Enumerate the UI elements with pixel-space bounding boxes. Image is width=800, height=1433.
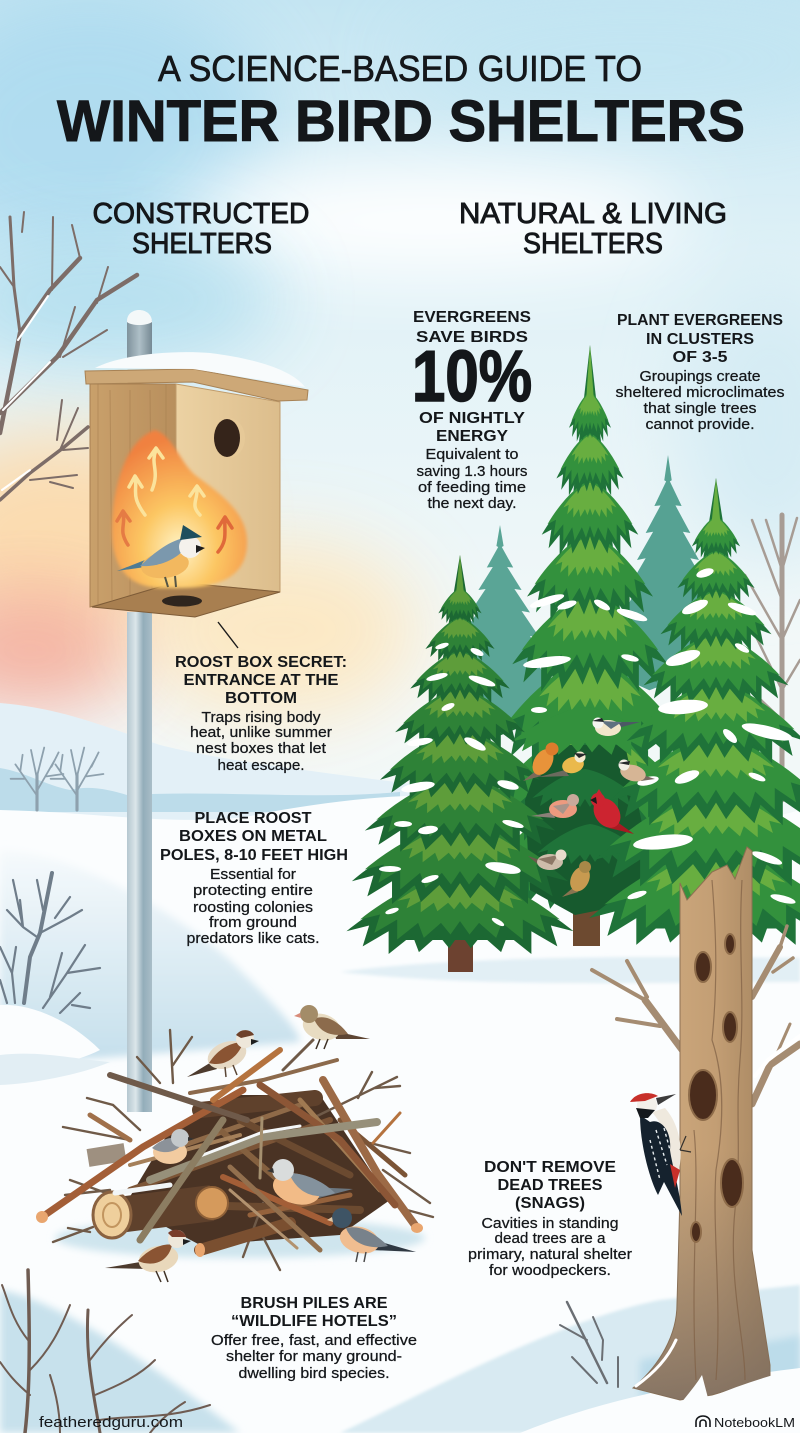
stacked branch: reddish [42,1090,243,1217]
callout: roost box secret [175,654,347,774]
bare tree: upper left [0,212,137,500]
hole interior [214,419,240,457]
front hole [213,418,245,458]
callout: plant in clusters: cannot provide. [646,417,754,433]
bird: junco [327,1208,416,1262]
bare tree: bottom left [0,1270,210,1433]
snag branches [592,926,800,1104]
callout: evergreens save energy [412,309,532,512]
bird: brown top [294,1005,370,1049]
callout: snags [468,1159,632,1279]
callout: plant in clusters: that single trees [644,401,756,417]
evergreen trunk: centre [573,900,600,946]
pile interior [125,1095,390,1245]
callout: place on metal poles: POLES, 8-10 FEET HIGH [160,847,348,864]
snow landscape [0,703,800,1433]
callout: brush piles: “WILDLIFE HOTELS” [231,1313,397,1330]
callout: plant in clusters [616,312,784,433]
evergreen trunk: left [448,930,473,972]
callout: place on metal poles: predators like cats. [186,931,320,947]
dense sticks [130,1120,330,1190]
bare tree: right [740,515,800,800]
callout: evergreens save energy: EVERGREENS [413,309,531,326]
callout: evergreens save energy: saving 1.3 hours [416,464,528,480]
gap shade behind birds [525,745,650,915]
callout: plant in clusters: OF 3-5 [672,349,728,366]
heading: natural and living shelters: NATURAL & LIVING [459,198,727,230]
bird: sparrow ground [105,1230,191,1282]
snag trunk [633,847,770,1400]
cut logs [118,1203,212,1215]
callout: evergreens save energy: SAVE BIRDS [416,329,528,346]
evergreen: centre [480,345,700,912]
pile shadow [55,1218,425,1258]
callout: snags: dead trees are a [494,1231,606,1247]
log behind [200,1098,315,1110]
bird: titmouse in pile [267,1159,353,1210]
heading: constructed shelters: SHELTERS [132,228,272,260]
callout: roost box secret: heat, unlike summer [190,725,332,741]
woodpecker [630,1093,691,1216]
callout: roost box secret: BOTTOM [225,690,297,707]
callout: evergreens save energy: OF NIGHTLY [419,410,525,427]
snag base shading [633,1150,770,1400]
stub logs left [88,1152,125,1158]
callout: roost box secret: ENTRANCE AT THE [184,672,339,689]
bird: chickadee [592,718,640,736]
bird: yellow [539,752,587,777]
snow at snag base [660,1368,800,1433]
title: WINTER BIRD SHELTERS [57,89,745,154]
wood grain [98,384,166,604]
callout: place on metal poles: roosting colonies [193,900,313,916]
callout: evergreens save energy: Equivalent to [426,447,518,463]
title [57,48,745,154]
foreground branches [223,1177,330,1223]
callout: snags: primary, natural shelter [468,1247,632,1263]
callout: place on metal poles: PLACE ROOST [194,810,312,827]
callout: plant in clusters: Groupings create [640,369,760,385]
bare saplings: distant [11,748,103,810]
notebooklm mark: NotebookLM [714,1415,795,1430]
callout: place on metal poles: protecting entire [193,883,313,899]
callout: evergreens save energy: of feeding time [418,480,526,496]
roof snow [95,352,305,387]
callout: place on metal poles: BOXES ON METAL [179,828,327,845]
heading: constructed shelters: CONSTRUCTED [92,198,310,230]
background evergreen: teal right [606,455,730,690]
title: A SCIENCE-BASED GUIDE TO [158,48,642,89]
snag grain [694,880,745,1380]
bird: olive [562,861,594,897]
birds in evergreen [523,718,655,897]
callout: plant in clusters: IN CLUSTERS [646,331,754,348]
callout: brush piles: BRUSH PILES ARE [240,1295,388,1312]
callout: place on metal poles: Essential for [210,867,296,883]
bird: pink finch [531,794,579,818]
callout: evergreens save energy: ENERGY [436,428,508,445]
callout: snags: Cavities in standing [482,1216,618,1232]
callout: roost box secret: nest boxes that let [196,741,326,757]
bird: cardinal [588,789,634,834]
bird: sparrow top [187,1030,259,1077]
callout: snags: DON'T REMOVE [484,1159,616,1176]
callout: brush piles [211,1295,417,1382]
snow patches on evergreens [379,566,796,928]
callout: evergreens save energy: the next day. [428,496,516,512]
callout: evergreens save energy: 10% [412,337,532,417]
snag: dead tree [592,847,800,1433]
body heat glow [112,430,247,588]
heading: natural and living shelters: SHELTERS [523,228,663,260]
background evergreen: teal left [440,525,560,721]
callout: brush piles: shelter for many ground- [226,1349,402,1365]
boughs in gap [512,707,658,865]
heading: constructed shelters [92,198,310,260]
box left face [90,384,176,607]
box front face [176,384,280,592]
pointer line [218,622,238,648]
metal pole [127,310,152,1112]
roof [85,369,308,401]
callout: snags: DEAD TREES [498,1177,603,1194]
callout: roost box secret: heat escape. [218,758,304,774]
callout: snags: for woodpeckers. [489,1263,611,1279]
evergreen: right [589,478,800,945]
heat arrows [117,448,232,552]
callout: snags: (SNAGS) [515,1195,585,1212]
callout: plant in clusters: sheltered microclimates [616,385,784,401]
box floor [92,582,280,617]
snow strip on root [636,1340,676,1386]
callout: brush piles: dwelling bird species. [238,1366,390,1382]
titmouse [117,525,205,587]
callout: brush piles: Offer free, fast, and effective [211,1333,417,1349]
evergreen: left [346,555,574,954]
callout: place on metal poles: from ground [209,915,297,931]
callout: roost box secret: Traps rising body [202,710,321,726]
brush pile birds [105,1005,416,1282]
bird: gray in pile [152,1129,194,1164]
callout: place on metal poles [160,810,348,947]
snag cavities [689,934,743,1242]
floor entrance [162,596,202,606]
callout: plant in clusters: PLANT EVERGREENS [617,312,783,329]
bird: orange [523,742,558,781]
heading: natural and living shelters [459,198,727,260]
bare tree: lower left [0,873,100,1013]
bare sapling: lower right [560,1302,618,1387]
bird: pale [618,760,655,784]
source url: featheredguru.com [39,1414,183,1431]
thin twigs [53,1030,433,1270]
brush pile [36,1030,433,1270]
callout: roost box secret: ROOST BOX SECRET: [175,654,347,671]
roost box [85,352,308,617]
bird: brown [528,850,566,870]
